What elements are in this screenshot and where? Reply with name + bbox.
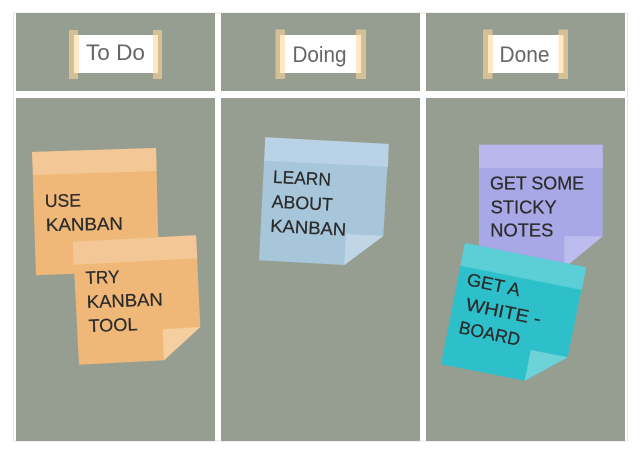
sticky note: Use Kanban: KANBAN — [46, 214, 123, 235]
sticky note: Try Kanban Tool: TRY — [85, 267, 120, 288]
sticky note: Get a White-board — [441, 243, 586, 381]
sticky note: Get Some Sticky Notes: STICKY — [491, 197, 557, 217]
sticky note: Learn About Kanban — [259, 137, 389, 265]
sticky note: Learn About Kanban: LEARN — [272, 167, 331, 190]
sticky note: Get a White-board: WHITE - — [464, 294, 543, 329]
sticky note: Learn About Kanban: KANBAN — [270, 216, 347, 240]
sticky note: Use Kanban — [32, 148, 159, 275]
heading: To Do — [69, 30, 162, 79]
sticky note: Get Some Sticky Notes: GET SOME — [490, 173, 584, 193]
sticky note: Use Kanban: USE — [45, 190, 81, 211]
heading: Done: Done — [500, 42, 550, 67]
sticky note: Get a White-board: GET A — [465, 269, 522, 300]
sticky note: Get Some Sticky Notes — [479, 145, 603, 268]
sticky note: Get Some Sticky Notes: NOTES — [490, 221, 553, 241]
heading: Done — [483, 30, 568, 79]
heading: To Do: To Do — [86, 40, 145, 65]
sticky note: Try Kanban Tool — [73, 235, 200, 365]
heading: Doing — [276, 30, 366, 79]
sticky note: Learn About Kanban: ABOUT — [271, 192, 333, 215]
sticky note: Try Kanban Tool: KANBAN — [86, 289, 163, 312]
sticky note: Try Kanban Tool: TOOL — [88, 314, 138, 336]
heading: Doing: Doing — [292, 42, 346, 67]
sticky note: Get a White-board: BOARD — [457, 317, 522, 350]
